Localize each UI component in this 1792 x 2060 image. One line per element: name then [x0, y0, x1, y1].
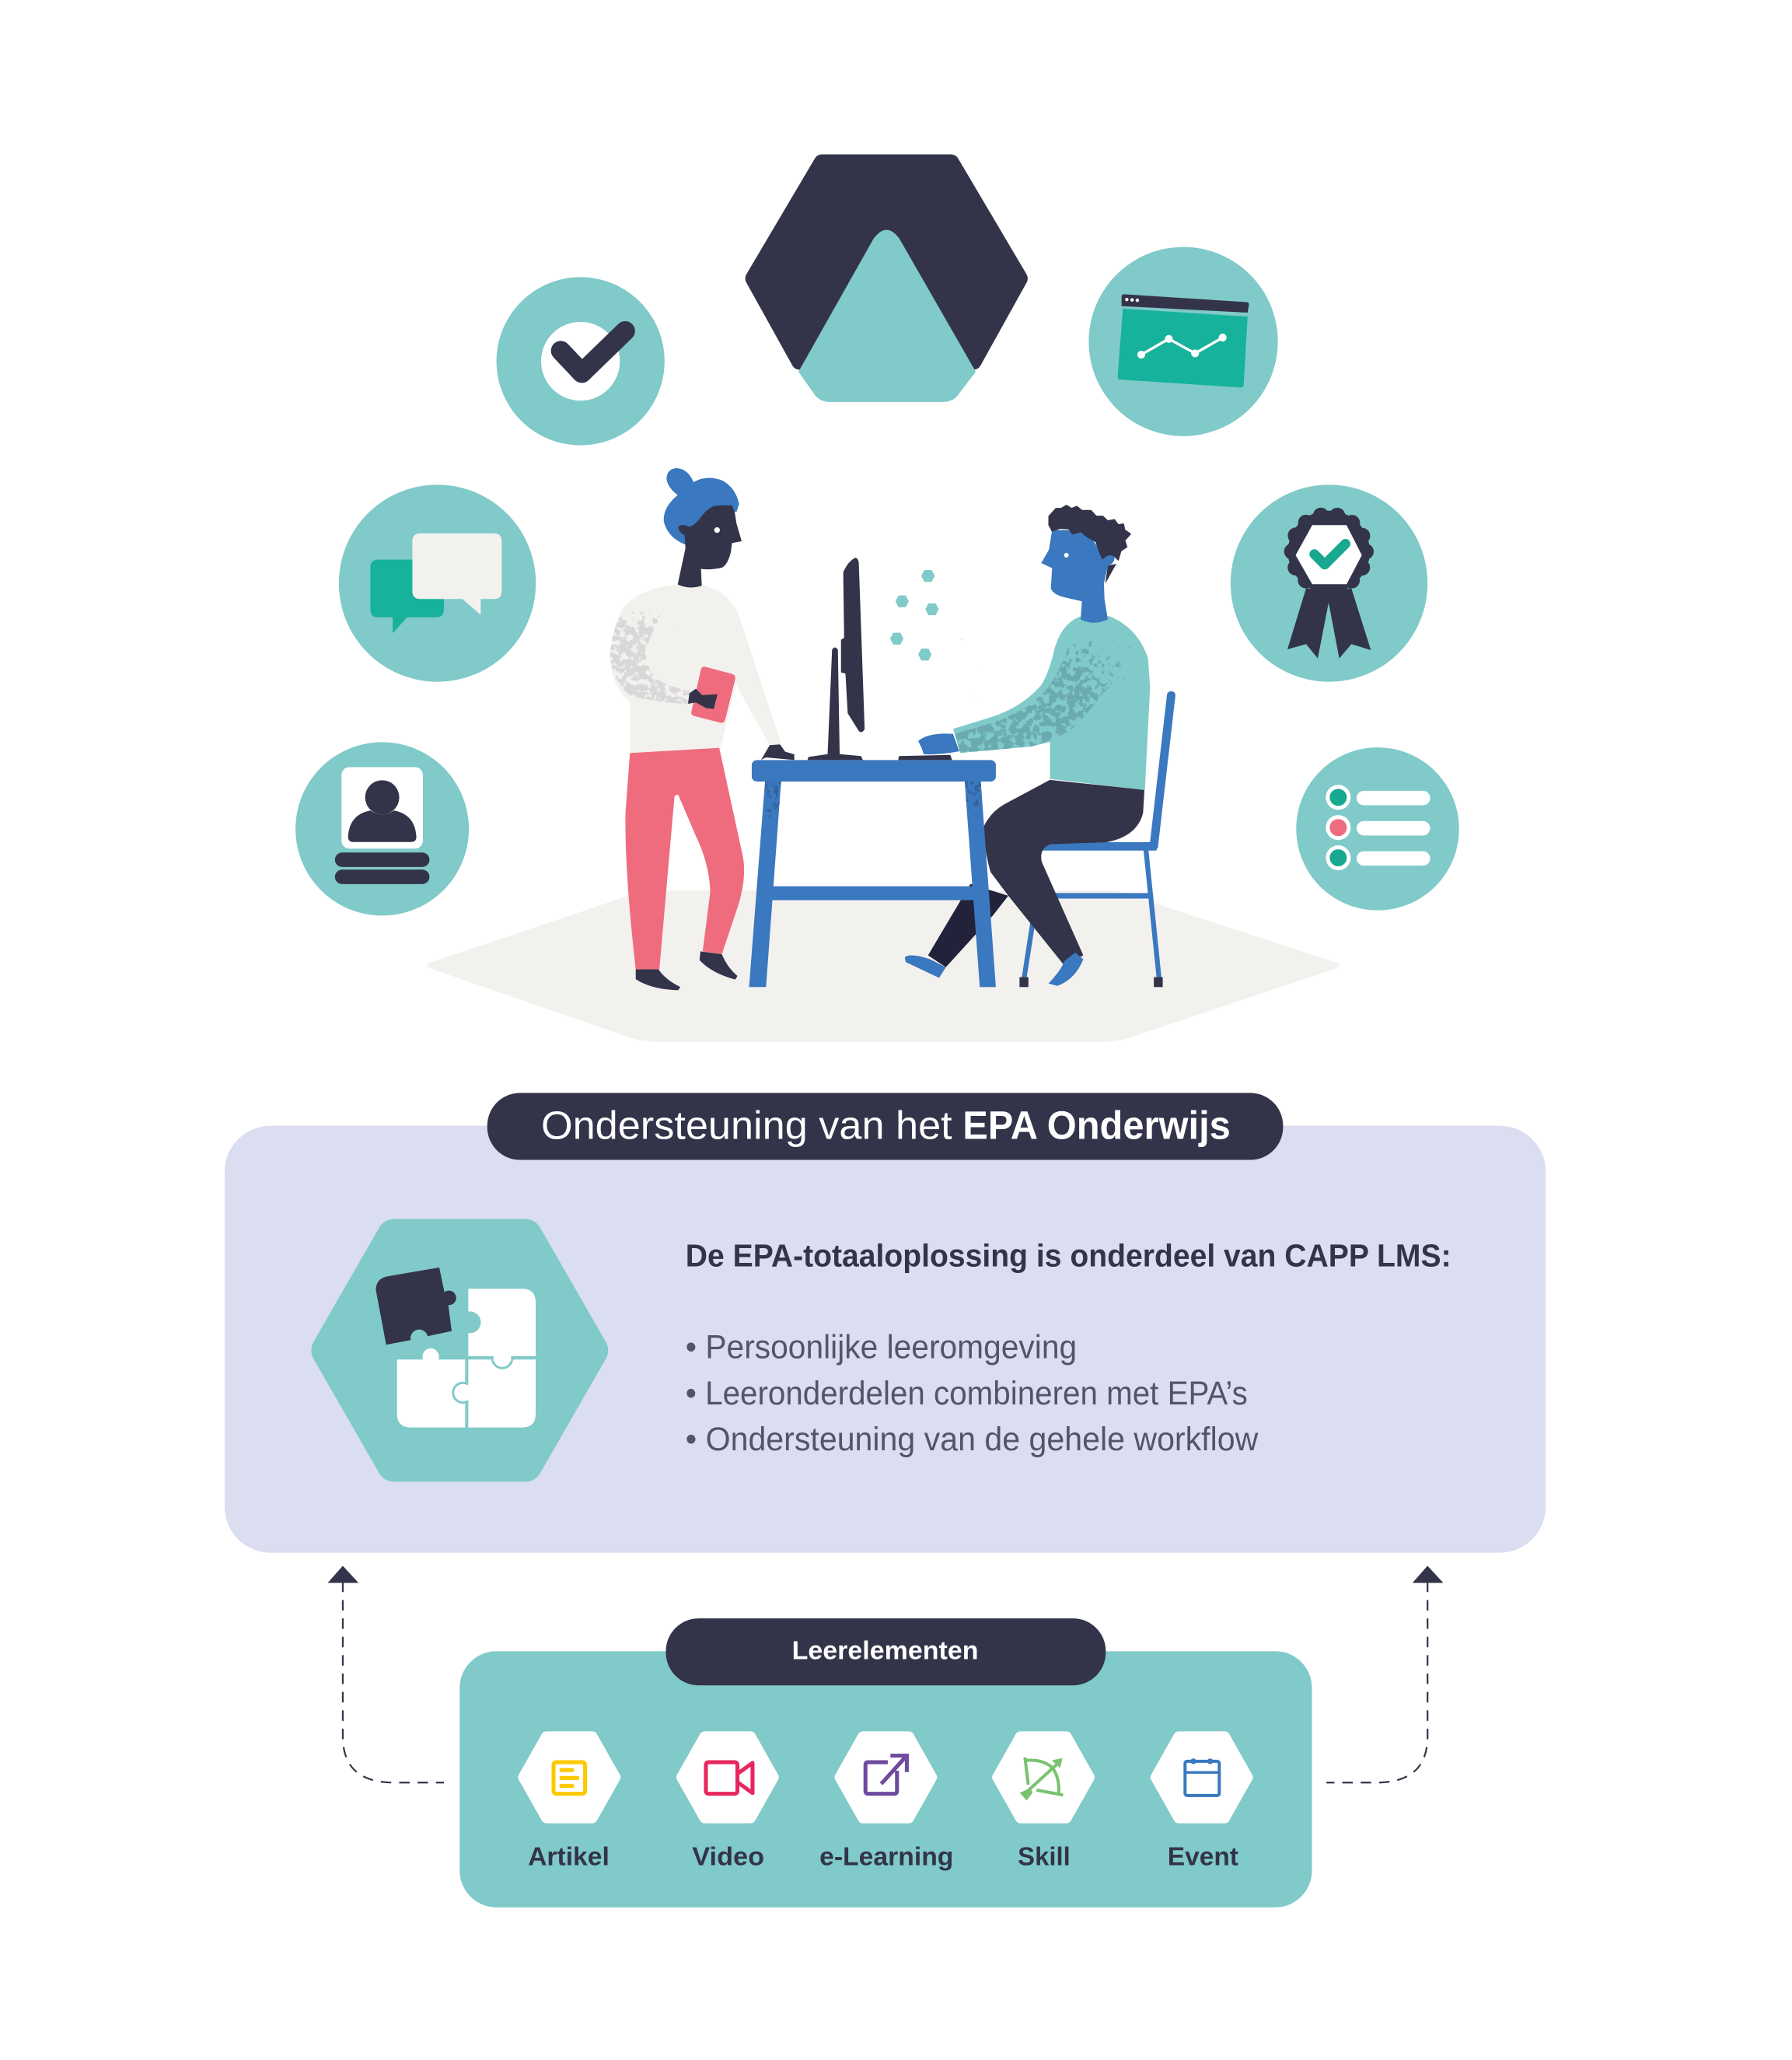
heading pill: Ondersteuning van het: [541, 1103, 952, 1148]
seated man sweater: [953, 616, 1150, 790]
text: bullet list: • Persoonlijke leeromgeving: [686, 1329, 1077, 1366]
arrow: right dashed: [1326, 1566, 1443, 1782]
element: Event: [1156, 1736, 1248, 1872]
data hexagons: [890, 570, 938, 660]
element: Video: [682, 1736, 774, 1872]
chair and seated man's legs: [905, 695, 1172, 987]
standing woman sweater and tablet: [610, 585, 795, 760]
element: Artikel: [523, 1736, 615, 1872]
element: e-Learning: [819, 1736, 953, 1872]
text: bullet list: • Leeronderdelen combineren met EPA’s: [686, 1375, 1248, 1411]
logo hexagon: [754, 163, 1019, 402]
element: Skill: [997, 1736, 1089, 1872]
standing woman legs: [625, 747, 744, 990]
computer monitor: [808, 558, 865, 760]
text: bullet list: • Ondersteuning van de gehele workflow: [686, 1421, 1259, 1457]
heading pill: EPA Onderwijs: [962, 1103, 1231, 1148]
element: e-Learning: e-Learning: [819, 1842, 953, 1872]
heading pill: Leerelementen: [792, 1635, 978, 1665]
icon: chat bubbles circle: [339, 484, 536, 682]
arrow: left dashed: [327, 1566, 444, 1782]
text: bullet list: [686, 1329, 1259, 1457]
icon: profile circle: [295, 742, 469, 915]
standing woman head: [664, 468, 742, 587]
floor hexagon: [427, 890, 1340, 1042]
heading pill: [487, 1093, 1283, 1160]
illustration: two people at a desk: [610, 468, 1172, 990]
element: Event: Event: [1168, 1842, 1238, 1872]
icon: award badge circle: [1231, 484, 1427, 682]
panel: Leerelementen: [459, 1618, 1312, 1908]
element: Skill: Skill: [1018, 1842, 1071, 1872]
icon: puzzle hexagon: [328, 1236, 591, 1464]
icon: check circle: [497, 277, 665, 446]
icon: dashboard window circle: [1088, 247, 1278, 436]
heading pill: [665, 1618, 1106, 1685]
panel: EPA Onderwijs: [225, 1093, 1546, 1553]
element: Artikel: Artikel: [528, 1842, 610, 1872]
text: intro heading: De EPA-totaaloplossing is onderdeel van CAPP LMS:: [686, 1237, 1451, 1273]
element: Video: Video: [692, 1842, 764, 1872]
desk: [749, 755, 996, 987]
seated man head: [1041, 505, 1130, 623]
icon: checklist circle: [1296, 747, 1459, 911]
